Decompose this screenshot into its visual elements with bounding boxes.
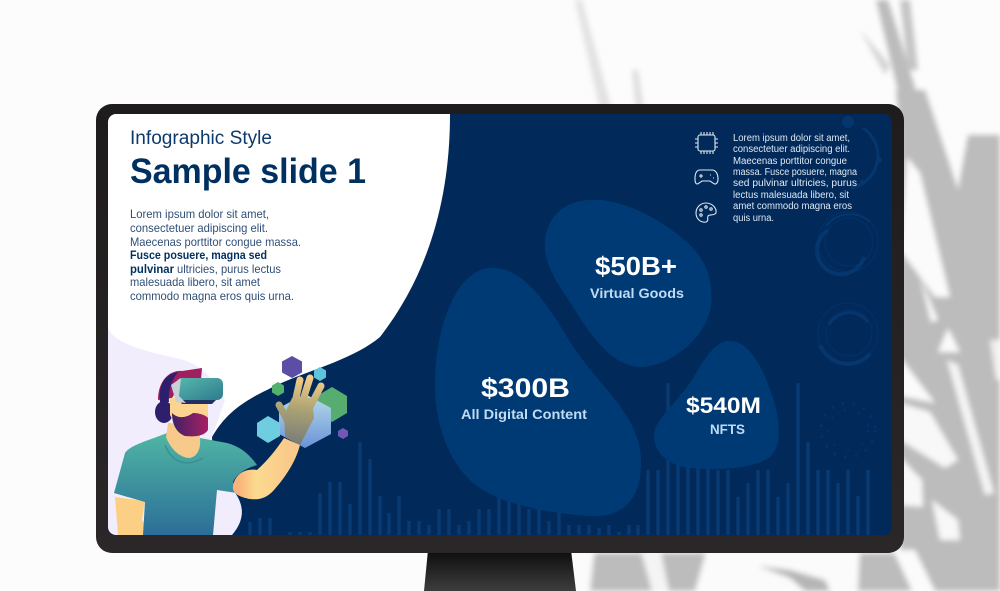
VR goggles (176, 378, 223, 400)
left arm (115, 497, 145, 535)
neck (166, 423, 200, 458)
stat: $300B all digital content: All Digital Content (461, 406, 587, 422)
icon: microchip (695, 132, 718, 154)
body text: ultricies, purus lectus (177, 262, 281, 276)
slide screen (108, 114, 892, 535)
monitor bezel (96, 104, 904, 553)
description text: sed pulvinar ultricies, purus (733, 178, 857, 189)
blob: NFTs (654, 341, 779, 469)
stat: $300B all digital content (461, 373, 587, 422)
goggle shadow (181, 400, 216, 404)
background: palm leaf shadows (565, 0, 1000, 591)
description text: quis urna. (733, 213, 774, 224)
t-shirt (114, 433, 257, 535)
face (170, 398, 208, 420)
stat: $540M NFTs: $540M (686, 393, 761, 418)
stat: $50B+ virtual goods (590, 251, 684, 301)
description text: massa. Fusce posuere, magna (733, 167, 857, 178)
stat: $50B+ virtual goods: $50B+ (595, 251, 677, 281)
figure: man with VR headset (114, 356, 348, 535)
blob: virtual goods (545, 200, 711, 367)
description text: amet commodo magna eros (733, 201, 852, 212)
icon: paint palette (696, 203, 716, 222)
monitor stand (424, 550, 576, 591)
heading: infographic style: Infographic Style (130, 128, 272, 149)
stat: $540M NFTs (686, 393, 761, 437)
white header area (108, 114, 450, 440)
decorative circular rings (817, 116, 882, 457)
body text: pulvinar (130, 262, 174, 276)
blob: all digital content (435, 268, 641, 516)
description text: Maecenas porttitor congue (733, 156, 847, 167)
body text: Lorem ipsum dolor sit amet, (130, 207, 269, 221)
body text (130, 207, 301, 303)
body text: malesuada libero, sit amet (130, 275, 261, 289)
hexagon cluster (257, 356, 348, 448)
body text: commodo magna eros quis urna. (130, 289, 294, 303)
palm (284, 398, 314, 445)
gloved hand (279, 378, 321, 425)
description text (733, 133, 857, 224)
description text: lectus malesuada libero, sit (733, 190, 849, 201)
lavender backdrop behind figure (108, 328, 242, 535)
beard (172, 413, 208, 436)
stat: $50B+ virtual goods: Virtual Goods (590, 285, 684, 301)
description text: Lorem ipsum dolor sit amet, (733, 133, 850, 144)
body text: consectetuer adipiscing elit. (130, 221, 268, 235)
hair (158, 368, 202, 400)
collar (165, 445, 203, 463)
body text: Fusce posuere, magna sed (130, 248, 267, 262)
icon: game controller (695, 170, 718, 184)
heading: sample slide 1: Sample slide 1 (130, 152, 366, 191)
headphone (155, 402, 172, 423)
right arm (233, 438, 300, 499)
body text: Maecenas porttitor congue massa. (130, 235, 301, 249)
dark panel background (108, 114, 892, 535)
description text: consectetuer adipiscing elit. (733, 144, 850, 155)
stat: $300B all digital content: $300B (481, 373, 570, 403)
bar chart background (250, 383, 868, 535)
stat: $540M NFTs: NFTS (710, 421, 745, 437)
